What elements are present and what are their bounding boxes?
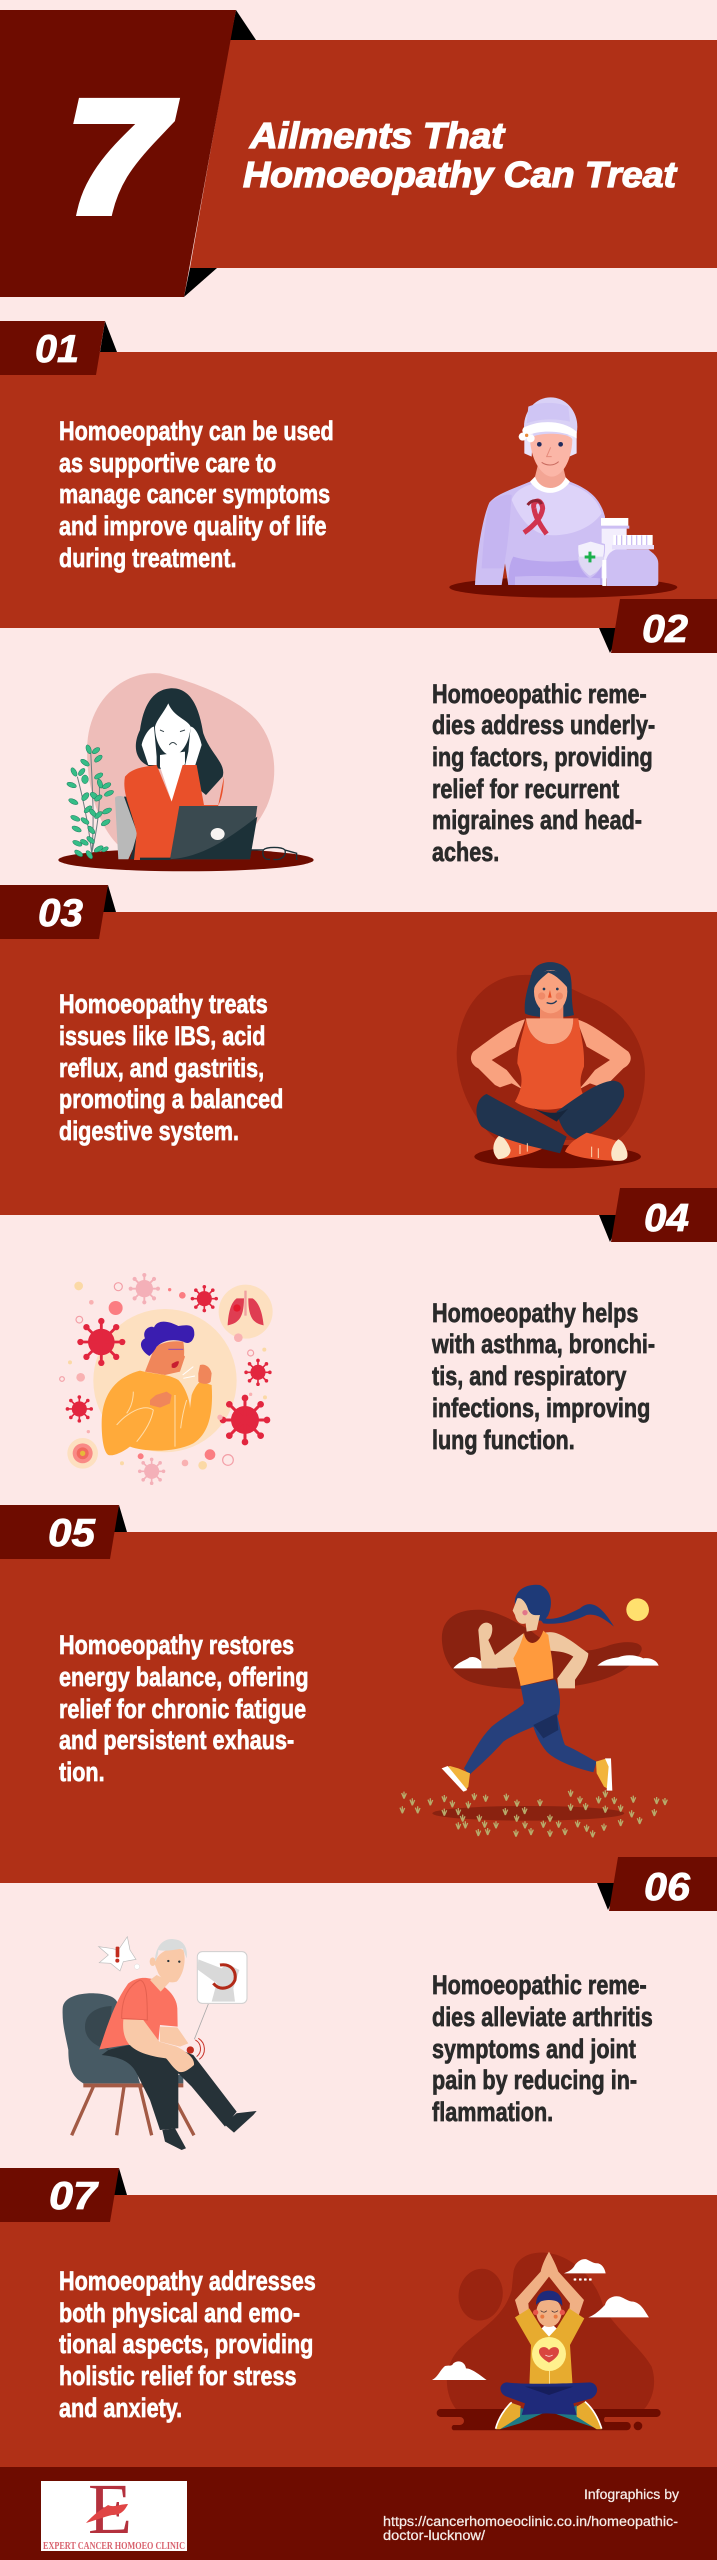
text [59,990,283,1147]
header fold bottom [184,268,217,297]
text: during treatment. [59,544,237,574]
text: relief for recurrent [432,775,619,805]
text: Homoeopathy addresses [59,2267,316,2297]
text: Homoeopathic reme- [432,1971,647,2001]
panel: section 05 [0,1505,717,1883]
text: issues like IBS, acid [59,1022,265,1052]
badge 01 [0,321,105,375]
text: tional aspects, providing [59,2330,313,2360]
number 02: 02 [642,608,688,651]
title: Homoeopathy Can Treat [243,154,678,195]
text: pain by reducing in- [432,2066,637,2096]
badge 02 [611,599,717,653]
text: with asthma, bronchi- [431,1330,655,1360]
text [59,417,334,574]
panel: section 04 [60,1188,717,1485]
band [0,1532,717,1883]
text: migraines and head- [432,806,642,836]
text [432,680,655,868]
text [431,1299,655,1456]
text [59,2267,316,2424]
text: aches. [432,838,499,868]
text: tis, and respiratory [432,1362,627,1392]
text: and improve quality of life [59,512,327,542]
credit: Infographics by [584,2487,679,2502]
number 04: 04 [644,1197,689,1240]
text: as supportive care to [59,449,276,479]
text: digestive system. [59,1117,239,1147]
text: lung function. [432,1426,575,1456]
number 07: 07 [49,2175,100,2218]
text: symptoms and joint [432,2035,636,2065]
badge fold [102,885,116,912]
text: Homoeopathy can be used [59,417,334,447]
number 03: 03 [38,892,83,935]
text: ing factors, providing [432,743,653,773]
credit [383,2487,679,2543]
header fold top [230,10,256,40]
header dark block [0,10,236,297]
badge 06 [609,1857,717,1911]
illustration: man with knee pain in armchair [63,1937,257,2150]
illustration: coughing man with viruses [60,1273,273,1485]
number 06: 06 [644,1866,690,1909]
band [0,912,717,1215]
text: dies alleviate arthritis [432,2003,653,2033]
panel: section 02 [58,599,717,871]
text: flammation. [432,2098,553,2128]
header red banner [190,40,717,268]
badge 03 [0,885,108,939]
badge 07 [0,2168,119,2222]
big number 7: 7 [66,68,176,247]
text: manage cancer symptoms [59,480,330,510]
text [432,1971,653,2128]
panel: section 06 [63,1857,717,2150]
text: Homoeopathy restores [59,1631,294,1661]
text: infections, improving [432,1394,650,1424]
panel: header [0,10,717,297]
text: relief for chronic fatigue [59,1695,306,1725]
badge fold [113,1505,127,1532]
badge fold [113,2168,127,2195]
panel: section 07 [0,2168,717,2467]
text [59,1631,309,1788]
text: and persistent exhaus- [59,1726,294,1756]
badge 05 [0,1505,119,1559]
illustration: running woman [400,1585,667,1837]
text: holistic relief for stress [59,2362,297,2392]
number 01: 01 [35,328,79,371]
credit: https://cancerhomoeoclinic.co.in/homeopathic- [383,2514,678,2529]
band [0,352,717,628]
footer band [0,2467,717,2560]
text: and anxiety. [59,2394,182,2424]
logo: E [88,2469,132,2549]
panel: section 03 [0,885,717,1215]
title [243,115,678,195]
title: Ailments That [249,115,506,156]
text: Homoeopathic reme- [432,680,647,710]
illustration: woman with migraine [58,673,314,871]
panel: section 01 [0,321,717,628]
logo: EXPERT CANCER HOMOEO CLINIC [43,2541,185,2552]
illustration: cancer patient [449,397,677,598]
number 05: 05 [48,1512,96,1555]
text: promoting a balanced [59,1085,283,1115]
text: tion. [59,1758,105,1788]
logo [41,2469,187,2552]
illustration: meditating man [432,2252,661,2430]
text: dies address underly- [432,711,655,741]
badge 04 [611,1188,717,1242]
text: energy balance, offering [59,1663,309,1693]
illustration: seated woman with digestive pain [457,962,645,1168]
credit: doctor-lucknow/ [383,2528,485,2543]
badge fold [597,1883,620,1910]
badge fold [599,1215,622,1242]
badge fold [100,321,117,352]
text: Homoeopathy treats [59,990,268,1020]
badge fold [599,628,622,653]
text: reflux, and gastritis, [59,1054,264,1084]
text: Homoeopathy helps [432,1299,638,1329]
band [0,2195,717,2467]
panel: footer [0,2467,717,2560]
text: both physical and emo- [59,2299,300,2329]
